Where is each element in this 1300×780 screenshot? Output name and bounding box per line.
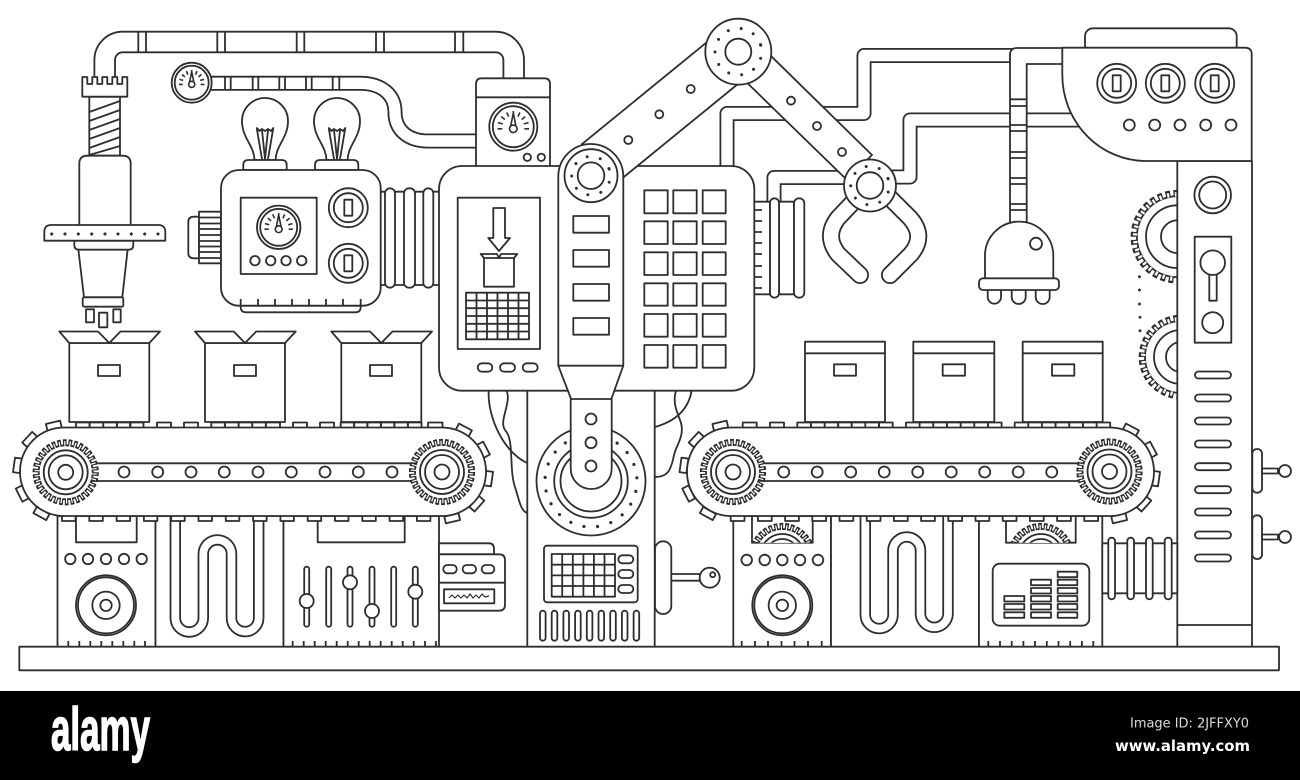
bulb 2 bbox=[314, 98, 360, 170]
claw fingers bbox=[831, 190, 918, 275]
alamy logo: alamy bbox=[51, 696, 150, 763]
upper right pipe bbox=[727, 56, 1020, 180]
packing screen bbox=[458, 198, 540, 349]
watermark band bbox=[0, 691, 1300, 780]
bellows between bulb unit and control panel bbox=[380, 188, 440, 288]
open box 2 bbox=[195, 332, 296, 422]
tower switch bbox=[1195, 237, 1231, 343]
open box 3 bbox=[331, 332, 432, 422]
belt lugs bbox=[76, 422, 442, 428]
right tower bbox=[1177, 161, 1252, 647]
left serpentine pipe bbox=[175, 514, 259, 632]
dispenser nozzle bbox=[44, 156, 165, 327]
tower vents bbox=[1195, 372, 1231, 562]
bulb 1 bbox=[242, 98, 288, 170]
left hand cooling knob bbox=[188, 212, 221, 263]
wires under the panel bbox=[489, 388, 692, 513]
plug head bbox=[979, 222, 1059, 304]
belt bbox=[687, 428, 1154, 516]
robot upper arm bbox=[582, 42, 737, 180]
head pipe bbox=[880, 120, 1090, 177]
arm side bellows bbox=[750, 198, 804, 298]
gears behind the tower bbox=[1134, 193, 1221, 396]
closed box 3 bbox=[1023, 342, 1103, 422]
cabinet sliders bbox=[300, 516, 422, 627]
device tower with gauge bbox=[476, 78, 550, 170]
right conveyor bbox=[679, 421, 1160, 523]
machine head bbox=[1062, 28, 1252, 161]
left conveyor bbox=[13, 421, 493, 523]
open box 1 bbox=[59, 332, 160, 422]
robot forearm bbox=[748, 57, 872, 180]
cabinet speaker bbox=[65, 516, 147, 635]
column lever bbox=[655, 541, 720, 614]
dropper screw head bbox=[82, 77, 127, 156]
closed box 2 bbox=[913, 342, 994, 422]
right serpentine pipe bbox=[865, 514, 948, 629]
belt bbox=[20, 428, 486, 516]
belt rollers bbox=[118, 466, 398, 478]
belt lugs bbox=[743, 422, 1110, 428]
wrist pipe bbox=[774, 178, 860, 205]
right cabinets bbox=[733, 516, 1102, 647]
machine screen bbox=[241, 198, 317, 274]
rotary ring bbox=[536, 426, 646, 536]
lower right bellows bbox=[1102, 538, 1177, 599]
vertical robot arm bbox=[558, 144, 623, 489]
central column bbox=[527, 380, 655, 647]
gauge pipe bbox=[205, 77, 480, 141]
cabinet level meter bbox=[993, 516, 1089, 626]
website: www.alamy.com bbox=[1115, 737, 1250, 755]
hanging cord bbox=[1010, 48, 1070, 225]
control panel bbox=[439, 166, 754, 391]
bulb machine bbox=[221, 170, 381, 312]
cabinet speaker with gear bbox=[741, 516, 823, 635]
belt rollers bbox=[778, 466, 1057, 478]
column vents bbox=[540, 611, 639, 641]
closed box 1 bbox=[805, 342, 885, 422]
side levers bbox=[1252, 449, 1291, 559]
panel pills bbox=[478, 363, 538, 372]
column keypad bbox=[544, 546, 638, 602]
side monitor bbox=[439, 543, 505, 611]
image id: Image ID: 2JFFXY0 bbox=[1130, 715, 1249, 731]
base plate bbox=[19, 647, 1279, 670]
top joint bbox=[705, 19, 771, 85]
small pressure gauge bbox=[172, 63, 212, 103]
left cabinets bbox=[58, 516, 439, 647]
top pipe bbox=[105, 32, 514, 80]
wrist joint bbox=[844, 160, 896, 212]
button grid bbox=[644, 190, 726, 368]
